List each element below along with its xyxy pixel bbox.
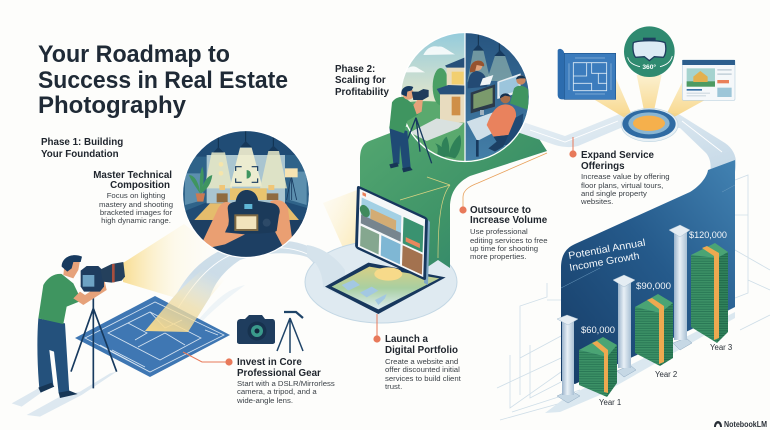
marker: core gear <box>225 358 233 366</box>
plant <box>189 167 212 193</box>
icon: camera <box>237 315 275 344</box>
connector: outsource <box>463 153 547 210</box>
shirt <box>38 274 82 324</box>
title: Success in Real Estate <box>38 67 288 94</box>
connector: launch <box>376 314 378 339</box>
monitor left <box>471 84 495 113</box>
light cones <box>467 50 491 82</box>
circle 1 ring <box>182 130 310 258</box>
camera body <box>81 266 104 292</box>
text: outsource to increase volume: Increase Volume <box>470 215 548 226</box>
ground strip under chart <box>545 312 735 413</box>
year labels: Year 2 <box>655 370 677 379</box>
tree <box>432 68 447 105</box>
value labels <box>581 230 727 335</box>
heading: phase 1: Your Foundation <box>41 149 119 160</box>
icon: 360 virtual tour <box>624 26 675 77</box>
text: master technical composition: bracketed images for <box>100 208 173 217</box>
camera <box>412 89 429 100</box>
arm <box>73 278 107 305</box>
360 label: 360° <box>642 63 656 71</box>
bed <box>230 188 267 200</box>
text: outsource to increase volume <box>470 205 548 261</box>
paper <box>480 75 493 86</box>
ring hub <box>621 108 678 142</box>
window <box>452 72 464 84</box>
value labels: $120,000 <box>689 230 727 240</box>
icon: property website <box>682 60 735 100</box>
blue panel <box>561 160 735 384</box>
camera screen <box>234 214 258 231</box>
service light beams <box>595 75 705 120</box>
hair <box>401 86 413 97</box>
text: expand service offerings: Offerings <box>581 161 625 172</box>
text: launch a digital portfolio: offer discounted initial <box>385 365 460 374</box>
path and steps <box>410 118 463 141</box>
value labels: $60,000 <box>581 325 615 335</box>
text: launch a digital portfolio: Create a website and <box>385 357 458 366</box>
text: expand service offerings: Increase value by offering <box>581 172 670 181</box>
hills <box>406 101 464 160</box>
text: master technical composition <box>93 170 173 225</box>
text: master technical composition: high dynamic range. <box>101 216 171 225</box>
circle: scaling <box>400 32 532 162</box>
circle 2 ring <box>400 32 530 162</box>
icon: tripod <box>277 312 303 353</box>
viewfinder <box>244 204 252 209</box>
woman head <box>474 60 482 71</box>
door <box>452 97 460 115</box>
marker: launch <box>373 335 381 343</box>
road: right segment <box>517 113 736 180</box>
offer panel <box>403 217 423 253</box>
camera dial <box>263 219 271 227</box>
lamps <box>218 130 273 148</box>
photo thumbnails <box>360 226 379 254</box>
text: master technical composition: mastery and shooting <box>99 200 173 209</box>
heading: phase 1 <box>41 137 123 160</box>
shadow <box>12 372 117 417</box>
text: invest in core gear: camera, a tripod, and a <box>237 387 317 396</box>
connector: expand service <box>572 137 574 154</box>
heading: phase 2: Phase 2: <box>335 64 375 75</box>
head <box>403 88 414 100</box>
heading: phase 2: Scaling for <box>335 75 386 86</box>
panel heading: Income Growth <box>569 251 640 274</box>
money stack: year 1 <box>579 337 617 397</box>
man in green <box>510 86 528 110</box>
figure: photographer with tripod <box>12 255 125 417</box>
text: outsource to increase volume: Outsource to <box>470 205 531 216</box>
text: launch a digital portfolio: services to build client <box>385 374 462 383</box>
green platform <box>360 110 547 272</box>
road continuation <box>307 245 345 298</box>
focus brackets <box>236 167 258 182</box>
rug <box>194 203 299 220</box>
road: phase 1 to tablet <box>145 241 345 332</box>
text: master technical composition: Focus on lighting <box>107 191 165 200</box>
floor lamp <box>287 177 297 200</box>
face and neck <box>63 260 80 278</box>
text: outsource to increase volume: more properties. <box>470 252 526 261</box>
back wall <box>207 155 285 203</box>
headset <box>633 41 666 61</box>
windows <box>185 172 307 205</box>
icons and hub: service offerings <box>558 26 735 142</box>
figure: phase 2 photographer <box>389 86 432 172</box>
text: invest in core gear: Start with a DSLR/Mirrorless <box>237 379 335 388</box>
leaves <box>435 135 461 158</box>
shoes <box>38 383 78 398</box>
title <box>38 41 288 119</box>
money stack: year 2 <box>635 294 673 366</box>
heading: phase 1: Phase 1: Building <box>41 137 123 148</box>
house lower <box>440 93 465 123</box>
text: invest in core gear: Professional Gear <box>237 368 321 379</box>
floor <box>189 220 303 257</box>
circle: technical composition <box>182 130 312 258</box>
text: outsource to increase volume: up time for shooting <box>470 244 538 253</box>
arm <box>413 93 423 114</box>
chair <box>498 113 523 145</box>
woman jacket <box>468 71 487 88</box>
light beam on road <box>145 250 240 332</box>
lens <box>101 262 125 283</box>
hair <box>62 255 82 272</box>
text: invest in core gear: Invest in Core <box>237 357 302 368</box>
shirt <box>389 97 418 133</box>
heading: phase 2: Profitability <box>335 87 389 98</box>
hands <box>203 200 292 248</box>
marker: expand service <box>569 150 577 158</box>
listing photo <box>361 197 401 242</box>
text: launch a digital portfolio: trust. <box>385 382 402 391</box>
light cones <box>204 152 232 188</box>
connector: core gear <box>183 352 226 362</box>
focus mark <box>247 170 251 179</box>
porch roof <box>437 85 465 94</box>
text: outsource to increase volume: Use professional <box>470 227 528 236</box>
tablet light beam <box>323 190 365 270</box>
pillar: year 3 <box>669 225 692 350</box>
icon: floor plan <box>558 49 616 99</box>
text: expand service offerings: and single property <box>581 189 647 198</box>
title: Your Roadmap to <box>38 41 230 68</box>
side walls <box>183 155 308 212</box>
pillar: year 2 <box>613 275 636 377</box>
text: master technical composition: Master Technical <box>93 170 172 181</box>
marker: outsource <box>459 206 467 214</box>
value labels: $90,000 <box>636 281 671 291</box>
orbit arrow <box>628 56 672 67</box>
pot <box>196 193 205 202</box>
camera body <box>228 190 280 234</box>
desk <box>466 112 493 140</box>
roof <box>445 57 465 68</box>
text: expand service offerings <box>580 150 670 206</box>
tripod <box>407 118 432 163</box>
woman hair <box>470 61 484 72</box>
year labels: Year 3 <box>710 343 732 352</box>
legs <box>37 318 69 393</box>
title: Photography <box>38 92 187 119</box>
man in orange <box>487 104 516 137</box>
blueprint floor <box>75 296 230 377</box>
legs <box>389 127 411 168</box>
ellipse: tablet platform <box>305 241 457 323</box>
heading: phase 2 <box>335 64 389 98</box>
bedside tables <box>217 193 278 202</box>
tripod <box>71 295 117 388</box>
wireframe lines: bottom right <box>497 175 770 420</box>
chart: income growth <box>557 225 732 407</box>
tablet base <box>325 263 446 314</box>
tablet screen <box>355 185 430 285</box>
text: expand service offerings: Expand Service <box>581 150 655 161</box>
camera light beam <box>123 224 218 298</box>
text: invest in core gear: wide-angle lens. <box>236 396 293 405</box>
logo dot <box>362 192 366 197</box>
divider <box>464 32 466 162</box>
text: expand service offerings: floor plans, virtual tours, <box>581 181 663 190</box>
pillar: year 1 <box>557 315 580 403</box>
monitor right <box>497 73 521 99</box>
text: launch a digital portfolio: Launch a <box>385 334 429 345</box>
text: launch a digital portfolio: Digital Portfolio <box>385 345 458 356</box>
year labels: Year 1 <box>599 398 621 407</box>
text: invest in core gear <box>236 357 335 405</box>
sconces <box>219 162 223 167</box>
panel heading: Potential Annual <box>568 238 646 262</box>
money stack: year 3 <box>691 243 728 343</box>
year labels <box>599 343 732 407</box>
house upper <box>446 68 464 86</box>
text: outsource to increase volume: editing services to free <box>470 236 548 245</box>
shoes <box>389 162 413 172</box>
text: master technical composition: Composition <box>110 180 170 191</box>
text: expand service offerings: websites. <box>580 197 613 206</box>
text: launch a digital portfolio <box>385 334 462 391</box>
clouds <box>403 46 455 72</box>
panel heading <box>568 238 646 274</box>
